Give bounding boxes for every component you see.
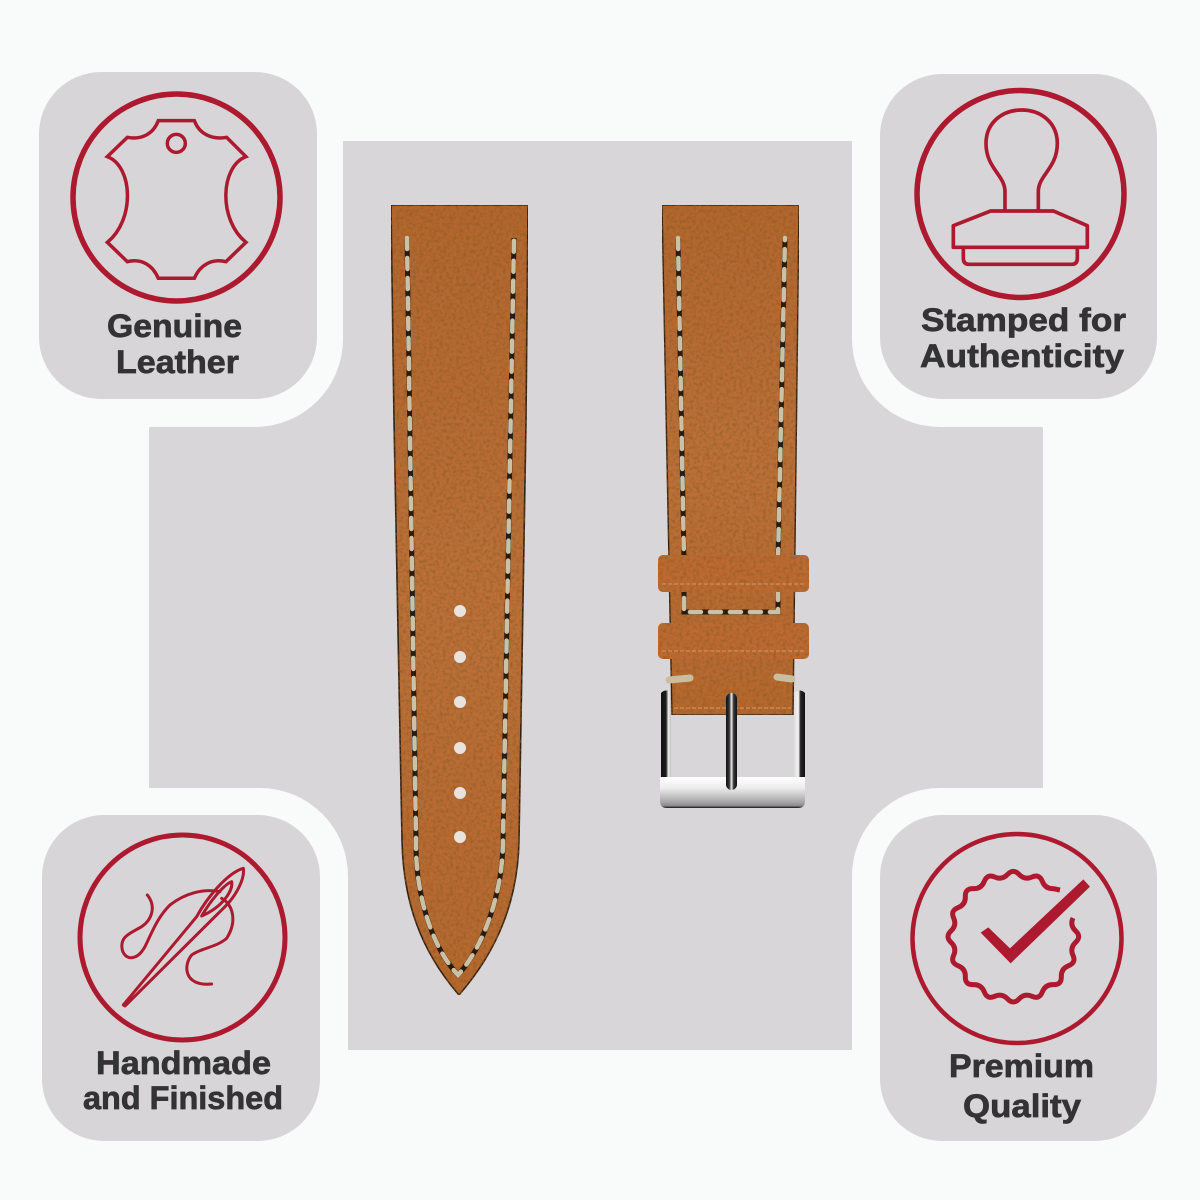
keeper detail lines [662,584,805,708]
label: stamped for authenticity: Authenticity [920,338,1124,374]
strap keeper lower [658,623,809,659]
buckle left bar [661,690,671,780]
watch strap: buckle piece [658,205,809,715]
panel: stamped for authenticity [880,74,1157,399]
buckle bottom bar [660,777,805,808]
central grey backdrop [149,141,1043,1050]
buckle pin [726,693,737,790]
short strap body [662,205,799,715]
strap keeper upper [658,555,809,592]
label: premium quality [949,1048,1094,1124]
thread ends [669,677,792,680]
card background [42,815,320,1141]
label: handmade and finished: and Finished [83,1080,283,1116]
card background [39,72,317,399]
long strap body [391,205,528,995]
label: premium quality: Quality [963,1088,1081,1124]
label: genuine leather: Genuine [107,308,242,344]
label: stamped for authenticity: Stamped for [921,302,1126,338]
panel: genuine leather [39,72,317,399]
icon: stamp [917,90,1124,298]
panel: premium quality [880,815,1157,1141]
label: stamped for authenticity [920,302,1126,374]
panel: handmade and finished [42,815,320,1141]
label: handmade and finished: Handmade [96,1045,271,1081]
label: genuine leather: Leather [116,344,239,380]
label: handmade and finished [83,1045,283,1116]
label: premium quality: Premium [949,1048,1094,1084]
card background [880,815,1157,1141]
watch strap: long piece [391,205,528,995]
short strap stitching [678,238,785,612]
card background [880,74,1157,399]
strap holes [454,605,466,843]
buckle right bar [794,690,805,780]
icon: needle and thread [80,835,285,1040]
icon: leather hide [73,94,280,301]
icon: quality seal with check [912,834,1122,1043]
watch buckle [660,690,805,808]
long strap stitching [407,238,514,975]
label: genuine leather [107,308,242,380]
